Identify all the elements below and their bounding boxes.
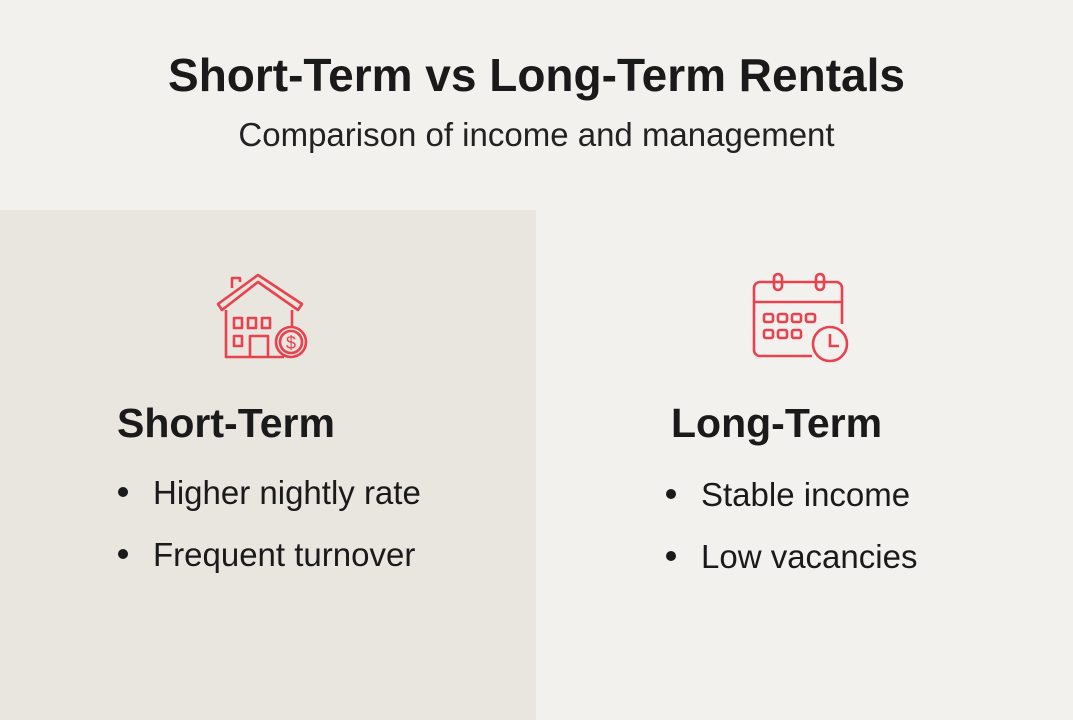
bullet list: long-term: Low vacancies	[701, 538, 917, 575]
icon: house with dollar	[216, 274, 308, 358]
title: Short-Term vs Long-Term Rentals	[168, 49, 905, 101]
panel: short-term background	[0, 210, 536, 720]
bullet list: long-term: Stable income	[701, 476, 910, 513]
icon: house with dollar: $	[286, 333, 296, 353]
bullet list: short-term: Higher nightly rate	[153, 474, 421, 511]
bullet list: long-term	[666, 476, 917, 575]
bullet list: short-term: Frequent turnover	[153, 536, 415, 573]
heading: short-term: Short-Term	[117, 400, 335, 446]
icon: calendar with clock	[752, 272, 848, 362]
subtitle: Comparison of income and management	[238, 116, 835, 153]
heading: long-term: Long-Term	[671, 400, 882, 446]
bullet list: short-term	[118, 474, 421, 573]
